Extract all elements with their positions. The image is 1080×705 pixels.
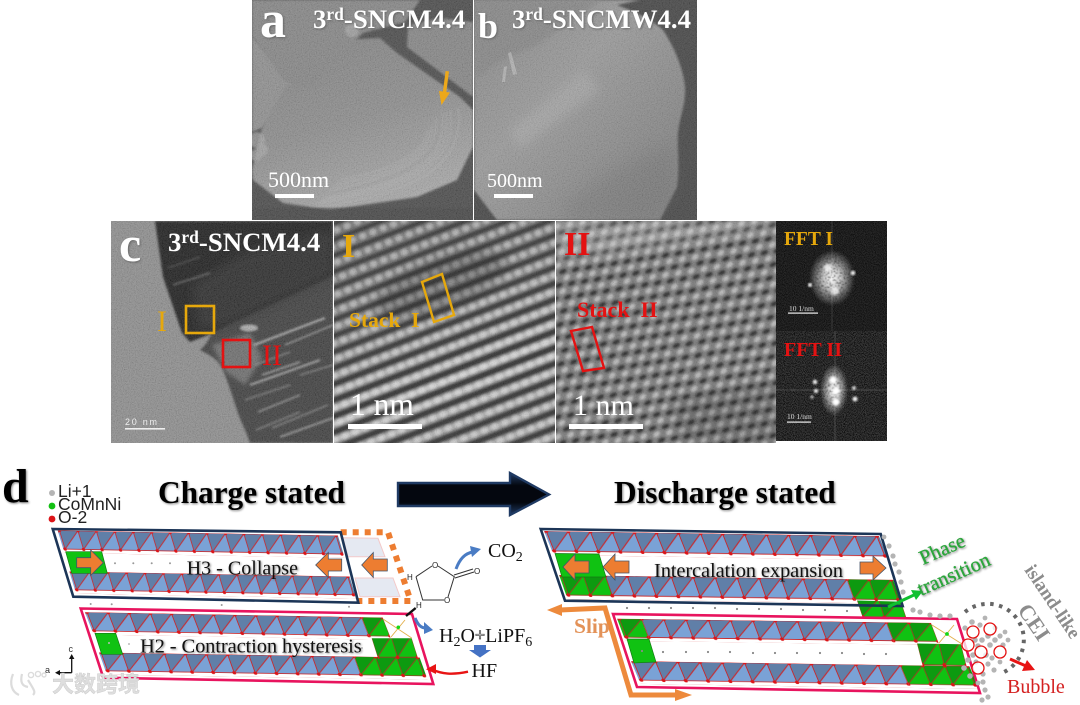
label: H2 - Contraction hysteresis: H2 - Contraction hysteresis [140, 636, 362, 658]
dashed collapsed outline [341, 532, 411, 601]
defect site [932, 625, 962, 644]
label: island-like CEI: CEI [1013, 599, 1055, 645]
label: I: I [342, 228, 355, 265]
panel: FFT I: 10 1/nm [789, 304, 814, 313]
upper-left green [617, 619, 650, 641]
lower slab [603, 576, 855, 603]
stack I box and label [349, 274, 454, 332]
arrow: bubble direction [1010, 659, 1035, 671]
legend: atom types: O-2 [58, 507, 87, 527]
selection box II: II [262, 339, 282, 372]
label: H2O + LiPF6: + [475, 625, 485, 645]
upper slab [642, 619, 895, 644]
arrow: orange step marker [439, 71, 450, 105]
H2 lower slab [99, 652, 362, 679]
arrow: blue down to HF [469, 645, 491, 658]
panel II: HRTEM lattice [556, 221, 776, 443]
right middle green [917, 644, 967, 668]
panel: FFT I: FFT I [784, 229, 833, 250]
panel: charged H2 contraction lattice [81, 608, 433, 684]
lower-right connecting green [857, 600, 907, 620]
scale bar: 1 nm panel II: 1 nm [573, 389, 634, 422]
H2 upper green [362, 617, 391, 640]
heading: Discharge stated: Discharge stated [614, 475, 836, 510]
panel c: TEM overview [111, 221, 333, 443]
Li dots in gap [90, 562, 350, 608]
Li dots [108, 642, 363, 649]
label: 3rd-SNCMW4.4: 3 [512, 4, 525, 34]
heading: Charge stated: Charge stated [158, 475, 345, 510]
label: Slip: Slip [574, 614, 610, 638]
bond: black stick to lattice [406, 608, 416, 616]
label: CO2: CO [488, 540, 516, 562]
label: 3rd-SNCM4.4: 3 [313, 4, 326, 34]
panel: FFT I [776, 221, 887, 331]
arrow: to CO2 [456, 546, 481, 569]
label: H2O + LiPF6: O [460, 625, 475, 647]
orange arrows [77, 550, 387, 578]
axes: a and c: c [68, 644, 74, 654]
molecule: ethylene carbonate: H [407, 573, 413, 582]
label: b: b [478, 6, 498, 46]
molecule: ethylene carbonate: H [416, 601, 422, 610]
stack II box and label [571, 297, 658, 371]
panel a: SEM image of SNCM particle [249, 0, 473, 220]
mid-left green [555, 554, 606, 577]
navy frame [53, 529, 358, 603]
label: Bubble: Bubble [1007, 676, 1065, 698]
navy frame [541, 529, 903, 606]
scale bar: 1 nm panel I: 1 nm [350, 387, 414, 422]
panel b: SEM image of SNCMW particle [474, 0, 697, 220]
panel: discharged slipped lattice [613, 614, 980, 693]
label: d: d [2, 460, 29, 513]
molecule: ethylene carbonate: O [432, 561, 438, 570]
label: H2O + LiPF6: LiPF [485, 625, 525, 647]
scale bar: 20 nm: 20 nm [125, 417, 157, 427]
pink frame [81, 608, 433, 684]
label: Phase transition: transition [914, 549, 994, 601]
label: 3rd-SNCM4.4 panel c: 3 [168, 227, 181, 257]
selection box I: I [157, 305, 167, 338]
defect site [383, 619, 412, 638]
left middle green [627, 639, 656, 663]
label: H2O + LiPF6: 6 [525, 635, 532, 650]
label: 3rd-SNCM4.4: rd [326, 4, 344, 24]
pink frame [613, 614, 980, 693]
panel: FFT II [776, 331, 887, 441]
panel I: HRTEM lattice [334, 221, 555, 443]
CEI particles [882, 535, 1010, 703]
axes: a and c: a [45, 665, 50, 675]
stack II box and label: Stack II [577, 297, 658, 322]
scale bar: 500nm panel a: 500nm [268, 167, 329, 192]
label: Phase transition: Phase [916, 530, 969, 570]
H3 lower slab [69, 571, 356, 599]
legend: atom types: Li+1 [58, 481, 92, 501]
H2 left green [95, 633, 123, 654]
arrow: slip [547, 604, 692, 701]
arrow: phase transition [888, 590, 923, 607]
label: c: c [119, 216, 141, 272]
orange arrows [563, 554, 886, 580]
watermark: 大数跨境 [52, 667, 140, 699]
H2 upper slab [85, 612, 370, 640]
legend: atom types [49, 481, 121, 527]
upper-right green [886, 622, 939, 645]
H2 middle green [372, 638, 418, 659]
selection box II [223, 339, 282, 372]
scale bar: 1 nm panel II [569, 389, 643, 429]
arrow: HF attack in red [426, 664, 468, 674]
arrow: charge to discharge [398, 473, 549, 515]
label: 3rd-SNCM4.4 panel c: rd [181, 227, 199, 247]
molecule: ethylene carbonate [407, 561, 480, 610]
Li dots between slabs [626, 607, 848, 612]
green transition block [66, 552, 107, 573]
molecule: ethylene carbonate: O [474, 567, 480, 576]
panel: discharged intercalation expansion lattice [541, 529, 907, 620]
CEI dashed ring [965, 604, 1024, 672]
label: HF: HF [472, 660, 497, 682]
panel: charged H3 collapse lattice [53, 529, 411, 608]
arrow: to H2O and LiPF6 [415, 618, 433, 634]
legend: atom types: CoMnNi [58, 494, 121, 514]
label: H2O + LiPF6: 2 [453, 635, 460, 650]
H2 lower green [354, 656, 428, 680]
molecule: ethylene carbonate: O [444, 596, 450, 605]
axes: a and c [45, 644, 74, 675]
label: 3rd-SNCMW4.4: rd [525, 4, 543, 24]
lower slab [631, 661, 910, 688]
label: 3rd-SNCMW4.4: -SNCMW4.4 [543, 4, 691, 34]
faded collapsed lattice [343, 538, 400, 597]
selection box I [157, 305, 214, 338]
stack I box and label: Stack I [349, 308, 419, 332]
scale bar: 20 nm [125, 417, 165, 430]
label: II: II [564, 226, 590, 263]
label: H2O + LiPF6: H [439, 625, 453, 647]
scale bar: 500nm panel b: 500nm [487, 170, 543, 192]
panel: FFT II: 10 1/nm [787, 412, 812, 421]
bubbles [962, 623, 1006, 674]
label: H3 - Collapse: H3 - Collapse [187, 557, 298, 579]
Li dots [641, 650, 887, 655]
label: Intercalation expansion: Intercalation expansion [654, 560, 843, 582]
label: 3rd-SNCM4.4 panel c: -SNCM4.4 [199, 227, 320, 257]
lower-left green [559, 575, 614, 600]
watermark [11, 667, 140, 699]
panel: FFT II: FFT II [784, 339, 842, 361]
label: 3rd-SNCM4.4: -SNCM4.4 [344, 4, 465, 34]
label: CO2: 2 [516, 550, 523, 565]
lower-right green [847, 579, 902, 604]
lower-right green [900, 665, 979, 689]
upper slab [544, 531, 889, 560]
H3 upper slab [58, 530, 345, 558]
